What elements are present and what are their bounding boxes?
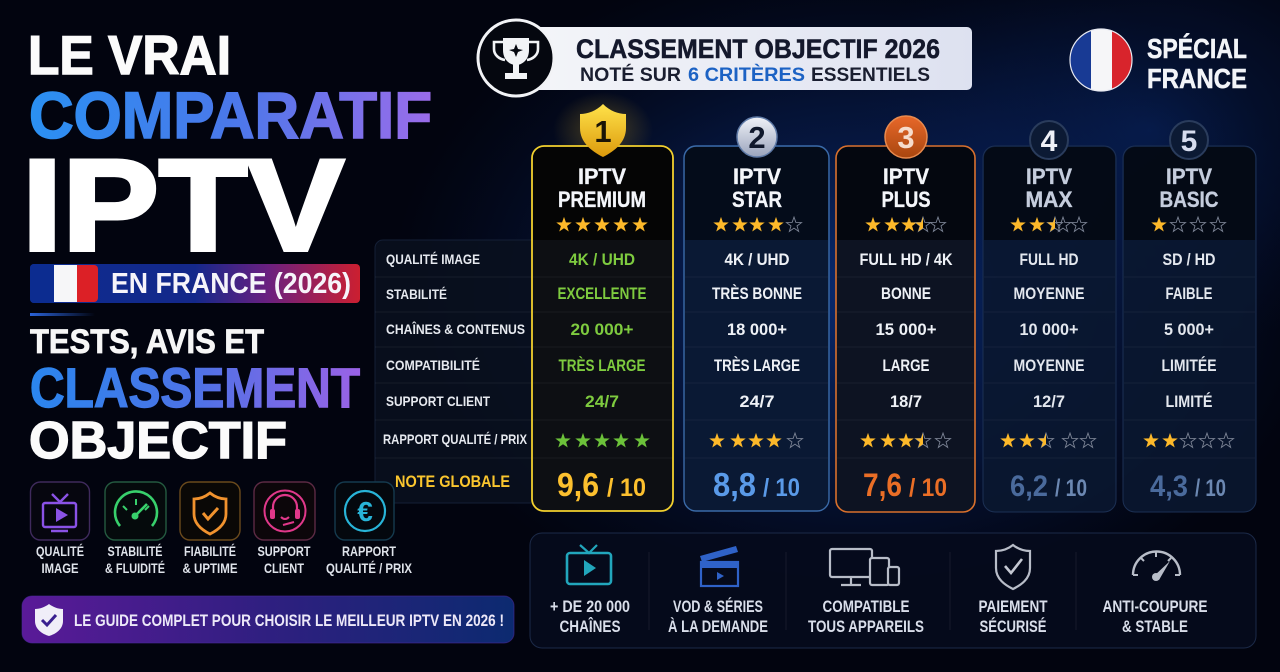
score: 6,2 (1010, 470, 1048, 503)
value stars (860, 433, 951, 448)
values: 15 000+ (876, 321, 936, 339)
score (863, 467, 947, 503)
values (860, 251, 953, 411)
values: SD / HD (1162, 251, 1216, 269)
label (182, 543, 238, 576)
icon: round french flag (1070, 29, 1132, 91)
callout: guide bar: LE GUIDE COMPLET POUR CHOISIR LE MEILLEUR IPTV EN 2026 ! (74, 611, 504, 630)
heading: comparatif: COMPARATIF (29, 78, 432, 152)
values: 12/7 (1033, 393, 1065, 411)
label: QUALITÉ (36, 543, 84, 559)
score: 9,6 (557, 466, 599, 503)
score (713, 466, 800, 503)
label (978, 598, 1048, 636)
values: 5 000+ (1164, 321, 1214, 339)
score: 8,8 (713, 466, 756, 503)
label (36, 543, 84, 576)
score: / 10 (1195, 475, 1226, 502)
label: rapport qualité prix: RAPPORT QUALITÉ / PRIX (383, 431, 528, 447)
name: IPTV (578, 164, 626, 189)
label: COMPATIBLE (822, 598, 910, 616)
subheading (580, 63, 930, 86)
name: IPTV (1026, 164, 1072, 189)
label: SÉCURISÉ (980, 617, 1046, 636)
value stars (1143, 433, 1234, 448)
heading: objectif: OBJECTIF (29, 412, 287, 470)
badge: spécial france (1070, 29, 1247, 94)
heading: classement: CLASSEMENT (30, 356, 360, 419)
label: support client: SUPPORT CLIENT (386, 393, 490, 409)
icon: clapperboard (700, 546, 738, 586)
values: 4K / UHD (724, 251, 790, 269)
name (732, 164, 782, 212)
values: 24/7 (740, 393, 774, 411)
icon: secure shield (996, 545, 1030, 589)
badge 4: 4 (1041, 125, 1058, 158)
score: / 10 (763, 474, 800, 502)
name: IPTV (883, 164, 929, 189)
subheading: NOTÉ SUR (580, 63, 681, 86)
values (558, 251, 646, 411)
badge 1: gold shield: 1 (594, 114, 612, 149)
value stars (1000, 433, 1096, 448)
badge 2: 2 (748, 120, 766, 155)
criteria icon row (30, 482, 413, 576)
callout: guide bar (22, 596, 514, 643)
score: / 10 (909, 474, 947, 502)
values: 10 000+ (1020, 321, 1078, 339)
name (882, 164, 930, 212)
label (258, 543, 311, 576)
label: QUALITÉ / PRIX (326, 560, 413, 576)
panel: features (530, 533, 1256, 648)
subtitle block (29, 323, 360, 470)
label: SUPPORT (258, 543, 311, 559)
label (808, 598, 924, 636)
icon: support (254, 482, 315, 540)
name: MAX (1026, 187, 1072, 212)
values (712, 251, 802, 411)
header stars (713, 217, 802, 232)
values: MOYENNE (1014, 357, 1084, 375)
label: STABILITÉ (108, 543, 162, 559)
values: BONNE (881, 285, 931, 303)
label: FIABILITÉ (184, 543, 236, 559)
label: qualité image: QUALITÉ IMAGE (386, 251, 480, 267)
score: 4,3 (1150, 470, 1188, 503)
card 3: iptv plus (836, 116, 975, 512)
score: 7,6 (863, 467, 902, 503)
table: criteria labels (375, 240, 535, 503)
score (1150, 470, 1226, 503)
label: & FLUIDITÉ (105, 560, 165, 576)
label: ANTI-COUPURE (1102, 598, 1208, 616)
name (558, 164, 646, 212)
name: PREMIUM (558, 187, 646, 212)
subheading: 6 CRITÈRES (688, 63, 805, 86)
header stars (865, 217, 946, 232)
title block (22, 24, 432, 278)
label: note globale: NOTE GLOBALE (395, 472, 510, 491)
badge 2 (737, 117, 777, 157)
values: TRÈS LARGE (558, 356, 646, 375)
name: IPTV (1166, 164, 1212, 189)
name (1026, 164, 1072, 212)
icon: rapport (335, 482, 394, 540)
badge 5: 5 (1181, 125, 1197, 158)
values: 18 000+ (727, 321, 787, 339)
label: chaînes et contenus: CHAÎNES & CONTENUS (386, 320, 525, 337)
value stars (709, 433, 803, 448)
values: FAIBLE (1166, 285, 1212, 303)
score (557, 466, 646, 503)
icon: trophy (478, 20, 554, 96)
badge: spécial france: SPÉCIAL (1147, 33, 1247, 64)
icon: fiabilité (180, 482, 240, 540)
header stars (556, 217, 648, 232)
icon: shield check (35, 604, 63, 636)
values: LIMITÉ (1166, 392, 1212, 411)
label: stabilité: STABILITÉ (386, 286, 447, 302)
label: + DE 20 000 (550, 598, 630, 616)
values: 24/7 (585, 393, 619, 411)
icon: qualité image (30, 482, 90, 540)
values: FULL HD / 4K (860, 251, 953, 269)
label: VOD & SÉRIES (673, 597, 763, 616)
heading: iptv: IPTV (22, 132, 344, 278)
subheading: ESSENTIELS (811, 64, 930, 86)
badge 5 (1170, 121, 1208, 159)
card 1: iptv premium (532, 92, 673, 511)
label: À LA DEMANDE (668, 617, 768, 636)
banner: en france 2026 (30, 264, 360, 303)
values (1014, 251, 1084, 411)
values: 20 000+ (570, 321, 634, 339)
badge: spécial france: FRANCE (1147, 63, 1247, 94)
score: / 10 (1055, 475, 1087, 502)
values: 4K / UHD (569, 251, 635, 269)
label: CHAÎNES (560, 617, 620, 636)
card 4: iptv max (983, 121, 1116, 512)
values: LIMITÉE (1162, 356, 1216, 375)
icon: devices (830, 549, 899, 585)
score: / 10 (607, 474, 646, 502)
values: LARGE (882, 357, 930, 375)
name: PLUS (882, 187, 930, 212)
label: & UPTIME (182, 560, 238, 576)
name (1160, 164, 1218, 212)
badge 4 (1030, 121, 1068, 159)
label: & STABLE (1122, 618, 1188, 636)
badge 3 (885, 116, 927, 158)
label: TOUS APPAREILS (808, 618, 924, 636)
values: 18/7 (890, 393, 922, 411)
values: MOYENNE (1014, 285, 1084, 303)
icon: tv (567, 545, 611, 584)
value stars (555, 433, 650, 448)
heading: CLASSEMENT OBJECTIF 2026 (576, 34, 940, 64)
label: compatibilité: COMPATIBILITÉ (386, 357, 480, 373)
label (105, 543, 165, 576)
icon: gauge (1133, 552, 1180, 581)
badge 1: gold shield (580, 104, 626, 157)
heading: tests avis et: TESTS, AVIS ET (30, 323, 264, 361)
header stars (1010, 217, 1087, 232)
name: STAR (732, 187, 782, 212)
label: IMAGE (42, 560, 78, 576)
label: RAPPORT (342, 543, 396, 559)
label (326, 543, 413, 576)
icon: stabilité (105, 482, 166, 540)
name: IPTV (733, 164, 781, 189)
label (668, 597, 768, 636)
icon: french flag (30, 264, 98, 303)
card 5: iptv basic (1123, 121, 1256, 512)
label: CLIENT (264, 560, 304, 576)
badge 3: 3 (897, 120, 915, 155)
heading: le vrai: LE VRAI (28, 24, 231, 86)
label: PAIEMENT (978, 598, 1048, 616)
values: FULL HD (1020, 251, 1079, 269)
label (550, 598, 630, 636)
card 2: iptv star (684, 117, 829, 511)
name: BASIC (1160, 187, 1218, 212)
values: EXCELLENTE (558, 285, 646, 303)
label (1102, 598, 1208, 636)
header: classement objectif (478, 20, 972, 96)
banner: en france 2026: EN FRANCE (2026) (111, 268, 351, 300)
header stars (1151, 217, 1226, 232)
values: TRÈS LARGE (714, 356, 800, 375)
values: TRÈS BONNE (712, 284, 802, 303)
values (1162, 251, 1216, 411)
icon: rapport: € (357, 496, 373, 527)
score (1010, 470, 1087, 503)
